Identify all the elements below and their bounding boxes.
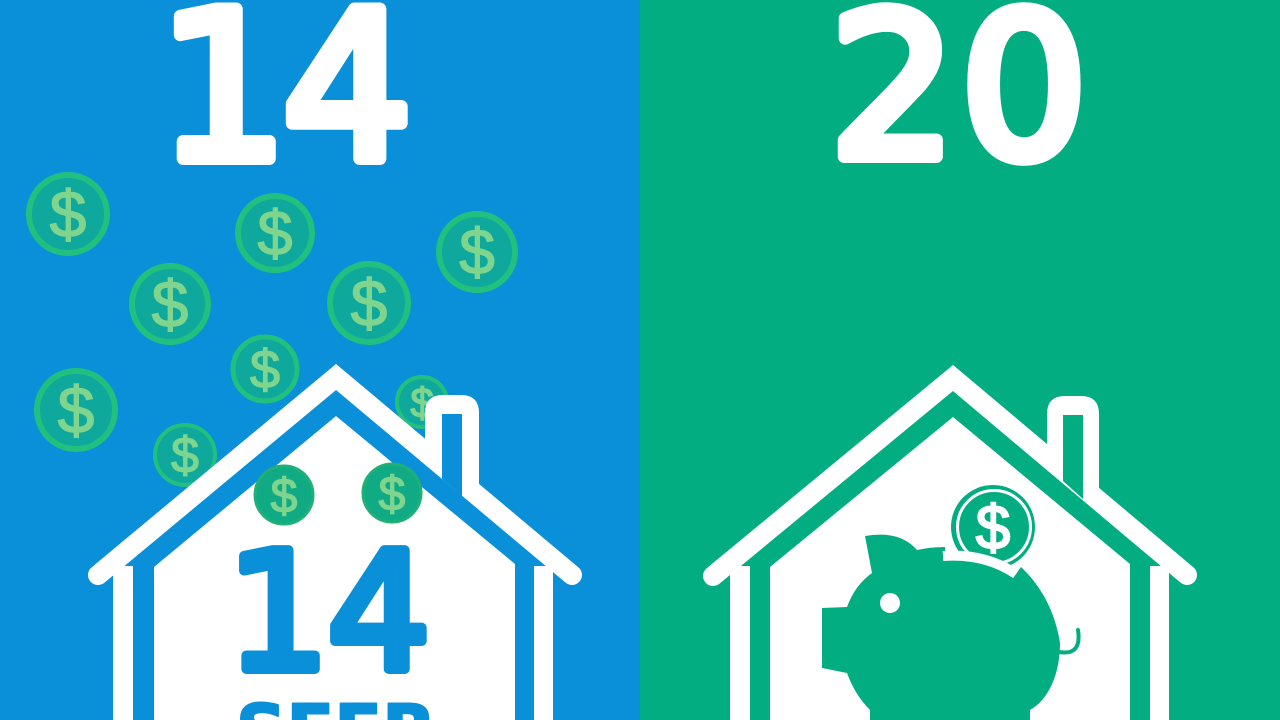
icons: coins in front of the house: $ xyxy=(379,468,405,521)
panel: 20 SEER (green) xyxy=(640,0,1280,720)
icon: dollar coin xyxy=(951,485,1035,569)
icons: falling dollar coins behind the house: $ xyxy=(351,266,387,340)
icons: falling dollar coins behind the house: $ xyxy=(459,216,495,288)
icon: house outline xyxy=(713,378,1187,720)
icon: coin slot xyxy=(943,556,1016,574)
icons: coins in front of the house xyxy=(255,464,421,524)
icons: falling dollar coins behind the house: $ xyxy=(58,373,94,447)
icon: dollar coin: $ xyxy=(976,494,1010,563)
panel: 14 SEER (blue) xyxy=(0,0,640,720)
icon: pig tail xyxy=(1059,630,1079,653)
label: 14 inside the house: 14 xyxy=(226,519,431,708)
icons: falling dollar coins behind the house xyxy=(29,175,515,485)
icon: pig body xyxy=(822,535,1060,720)
icon: pig eye xyxy=(880,593,900,613)
icons: coins in front of the house: $ xyxy=(271,470,297,523)
icons: falling dollar coins behind the house: $ xyxy=(50,177,86,251)
icons: falling dollar coins behind the house: $ xyxy=(257,199,293,269)
icons: falling dollar coins behind the house: $ xyxy=(152,267,188,341)
icons: falling dollar coins behind the house: $ xyxy=(171,427,199,483)
icon: house outline xyxy=(98,377,572,720)
icon: piggy bank with coin xyxy=(822,485,1079,720)
icons: falling dollar coins behind the house: $ xyxy=(250,340,280,400)
icons: falling dollar coins behind the house: $ xyxy=(410,379,434,426)
